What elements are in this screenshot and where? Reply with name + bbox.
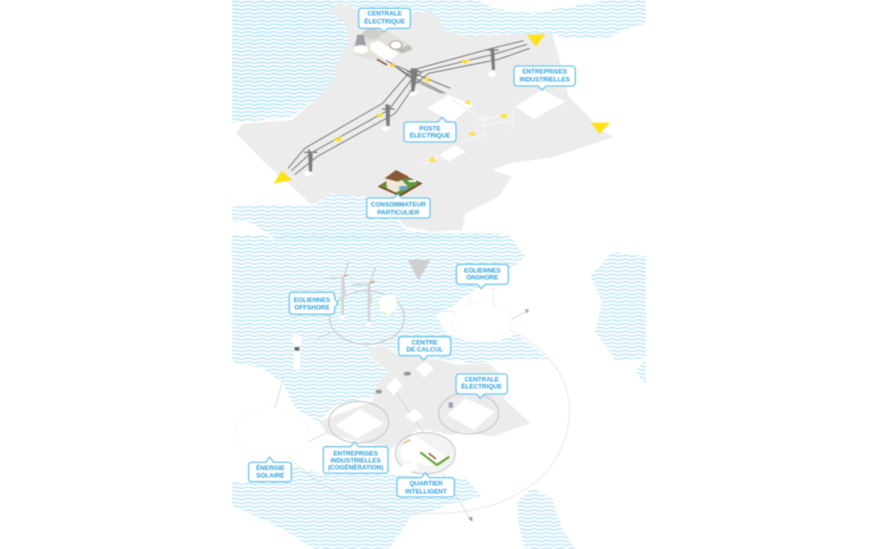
ring: smart district xyxy=(395,433,455,474)
icon: flow triangles xyxy=(273,34,610,184)
white plots xyxy=(335,361,495,473)
label: eoliennes onshore: ONSHORE xyxy=(466,275,498,282)
label: centre de calcul: DE CALCUL xyxy=(406,347,443,354)
icon: offshore wind turbines xyxy=(325,262,375,327)
water: main sea xyxy=(232,235,549,422)
label: entreprises industrielles: ENTREPRISES xyxy=(522,69,567,76)
icon: buoy xyxy=(292,335,302,370)
icon: green district xyxy=(404,440,449,465)
label: énergie solaire: SOLAIRE xyxy=(256,473,284,480)
label: centre de calcul xyxy=(399,337,451,360)
label: énergie solaire xyxy=(249,457,291,482)
label: eoliennes offshore xyxy=(289,292,338,314)
label: entreprises industrielles xyxy=(514,66,575,90)
icon: house xyxy=(378,170,423,197)
icon: white sun-like blob xyxy=(379,295,398,315)
icon: plant cylinder xyxy=(449,402,453,408)
network loop xyxy=(289,310,569,514)
label: quartier intelligent xyxy=(397,473,454,497)
ring: industry xyxy=(329,402,389,443)
water: left sea xyxy=(232,0,349,123)
panel: conventional grid map xyxy=(232,0,646,240)
water: upper sea xyxy=(232,0,646,123)
power plant xyxy=(352,29,414,65)
label: centrale électrique xyxy=(359,8,410,32)
water: southern sea xyxy=(232,465,482,549)
label: consommateur particulier: CONSOMMATEUR xyxy=(371,201,426,208)
land: offshore island xyxy=(440,301,524,342)
label: quartier intelligent: INTELLIGENT xyxy=(405,488,447,495)
label: entreprises industrielles cogénération xyxy=(323,442,388,473)
ring: power plant xyxy=(439,393,499,434)
power lines xyxy=(288,41,530,175)
arrow: onshore outflow xyxy=(525,309,529,314)
ring: onshore xyxy=(452,302,512,341)
arrow: southern outflow xyxy=(468,517,473,522)
ring: solar xyxy=(235,407,309,459)
water: eastern island xyxy=(590,252,646,360)
label: quartier intelligent: QUARTIER xyxy=(409,481,443,488)
panel: smart grid map xyxy=(232,235,646,549)
label: énergie solaire: ÉNERGIE xyxy=(256,463,285,472)
land: grey territory xyxy=(236,3,614,232)
label: entreprises industrielles cogénération: INDUSTRIELLES xyxy=(331,457,381,464)
icon: grey flow triangle xyxy=(408,260,430,280)
white plots xyxy=(303,71,565,177)
label: poste électrique: ÉLECTRIQUE xyxy=(410,131,450,140)
label: eoliennes onshore xyxy=(456,264,508,289)
label: centrale électrique xyxy=(456,374,507,398)
label: entreprises industrielles cogénération: (COGÉNÉRATION) xyxy=(328,463,383,472)
label: centrale électrique: CENTRALE xyxy=(464,377,499,384)
land: grey territory xyxy=(319,345,530,448)
substation towers xyxy=(419,100,515,167)
label: consommateur particulier: PARTICULIER xyxy=(377,209,420,216)
label: poste électrique: POSTE xyxy=(419,125,441,132)
label: entreprises industrielles: INDUSTRIELLES xyxy=(520,77,570,84)
icon: grey buildings xyxy=(375,372,411,394)
ring: offshore xyxy=(330,291,404,344)
pylons xyxy=(304,48,499,172)
label: poste électrique xyxy=(404,117,456,142)
label: eoliennes offshore: OFFSHORE xyxy=(294,305,330,312)
icon: onshore turbines xyxy=(465,287,499,308)
water: small eastern patch xyxy=(635,359,646,386)
label: eoliennes offshore: EOLIENNES xyxy=(294,297,330,304)
water: south-eastern patch xyxy=(517,488,575,549)
label: consommateur particulier xyxy=(367,194,430,218)
label: centrale électrique: CENTRALE xyxy=(367,11,402,18)
water: lower sea xyxy=(232,193,502,240)
connector lines xyxy=(275,311,527,521)
label: centrale électrique: ÉLECTRIQUE xyxy=(461,382,502,391)
label: eoliennes onshore: EOLIENNES xyxy=(464,268,501,275)
label: centrale électrique: ÉLECTRIQUE xyxy=(364,17,405,26)
label: entreprises industrielles cogénération: ENTREPRISES xyxy=(333,450,378,457)
label: centre de calcul: CENTRE xyxy=(412,339,438,346)
